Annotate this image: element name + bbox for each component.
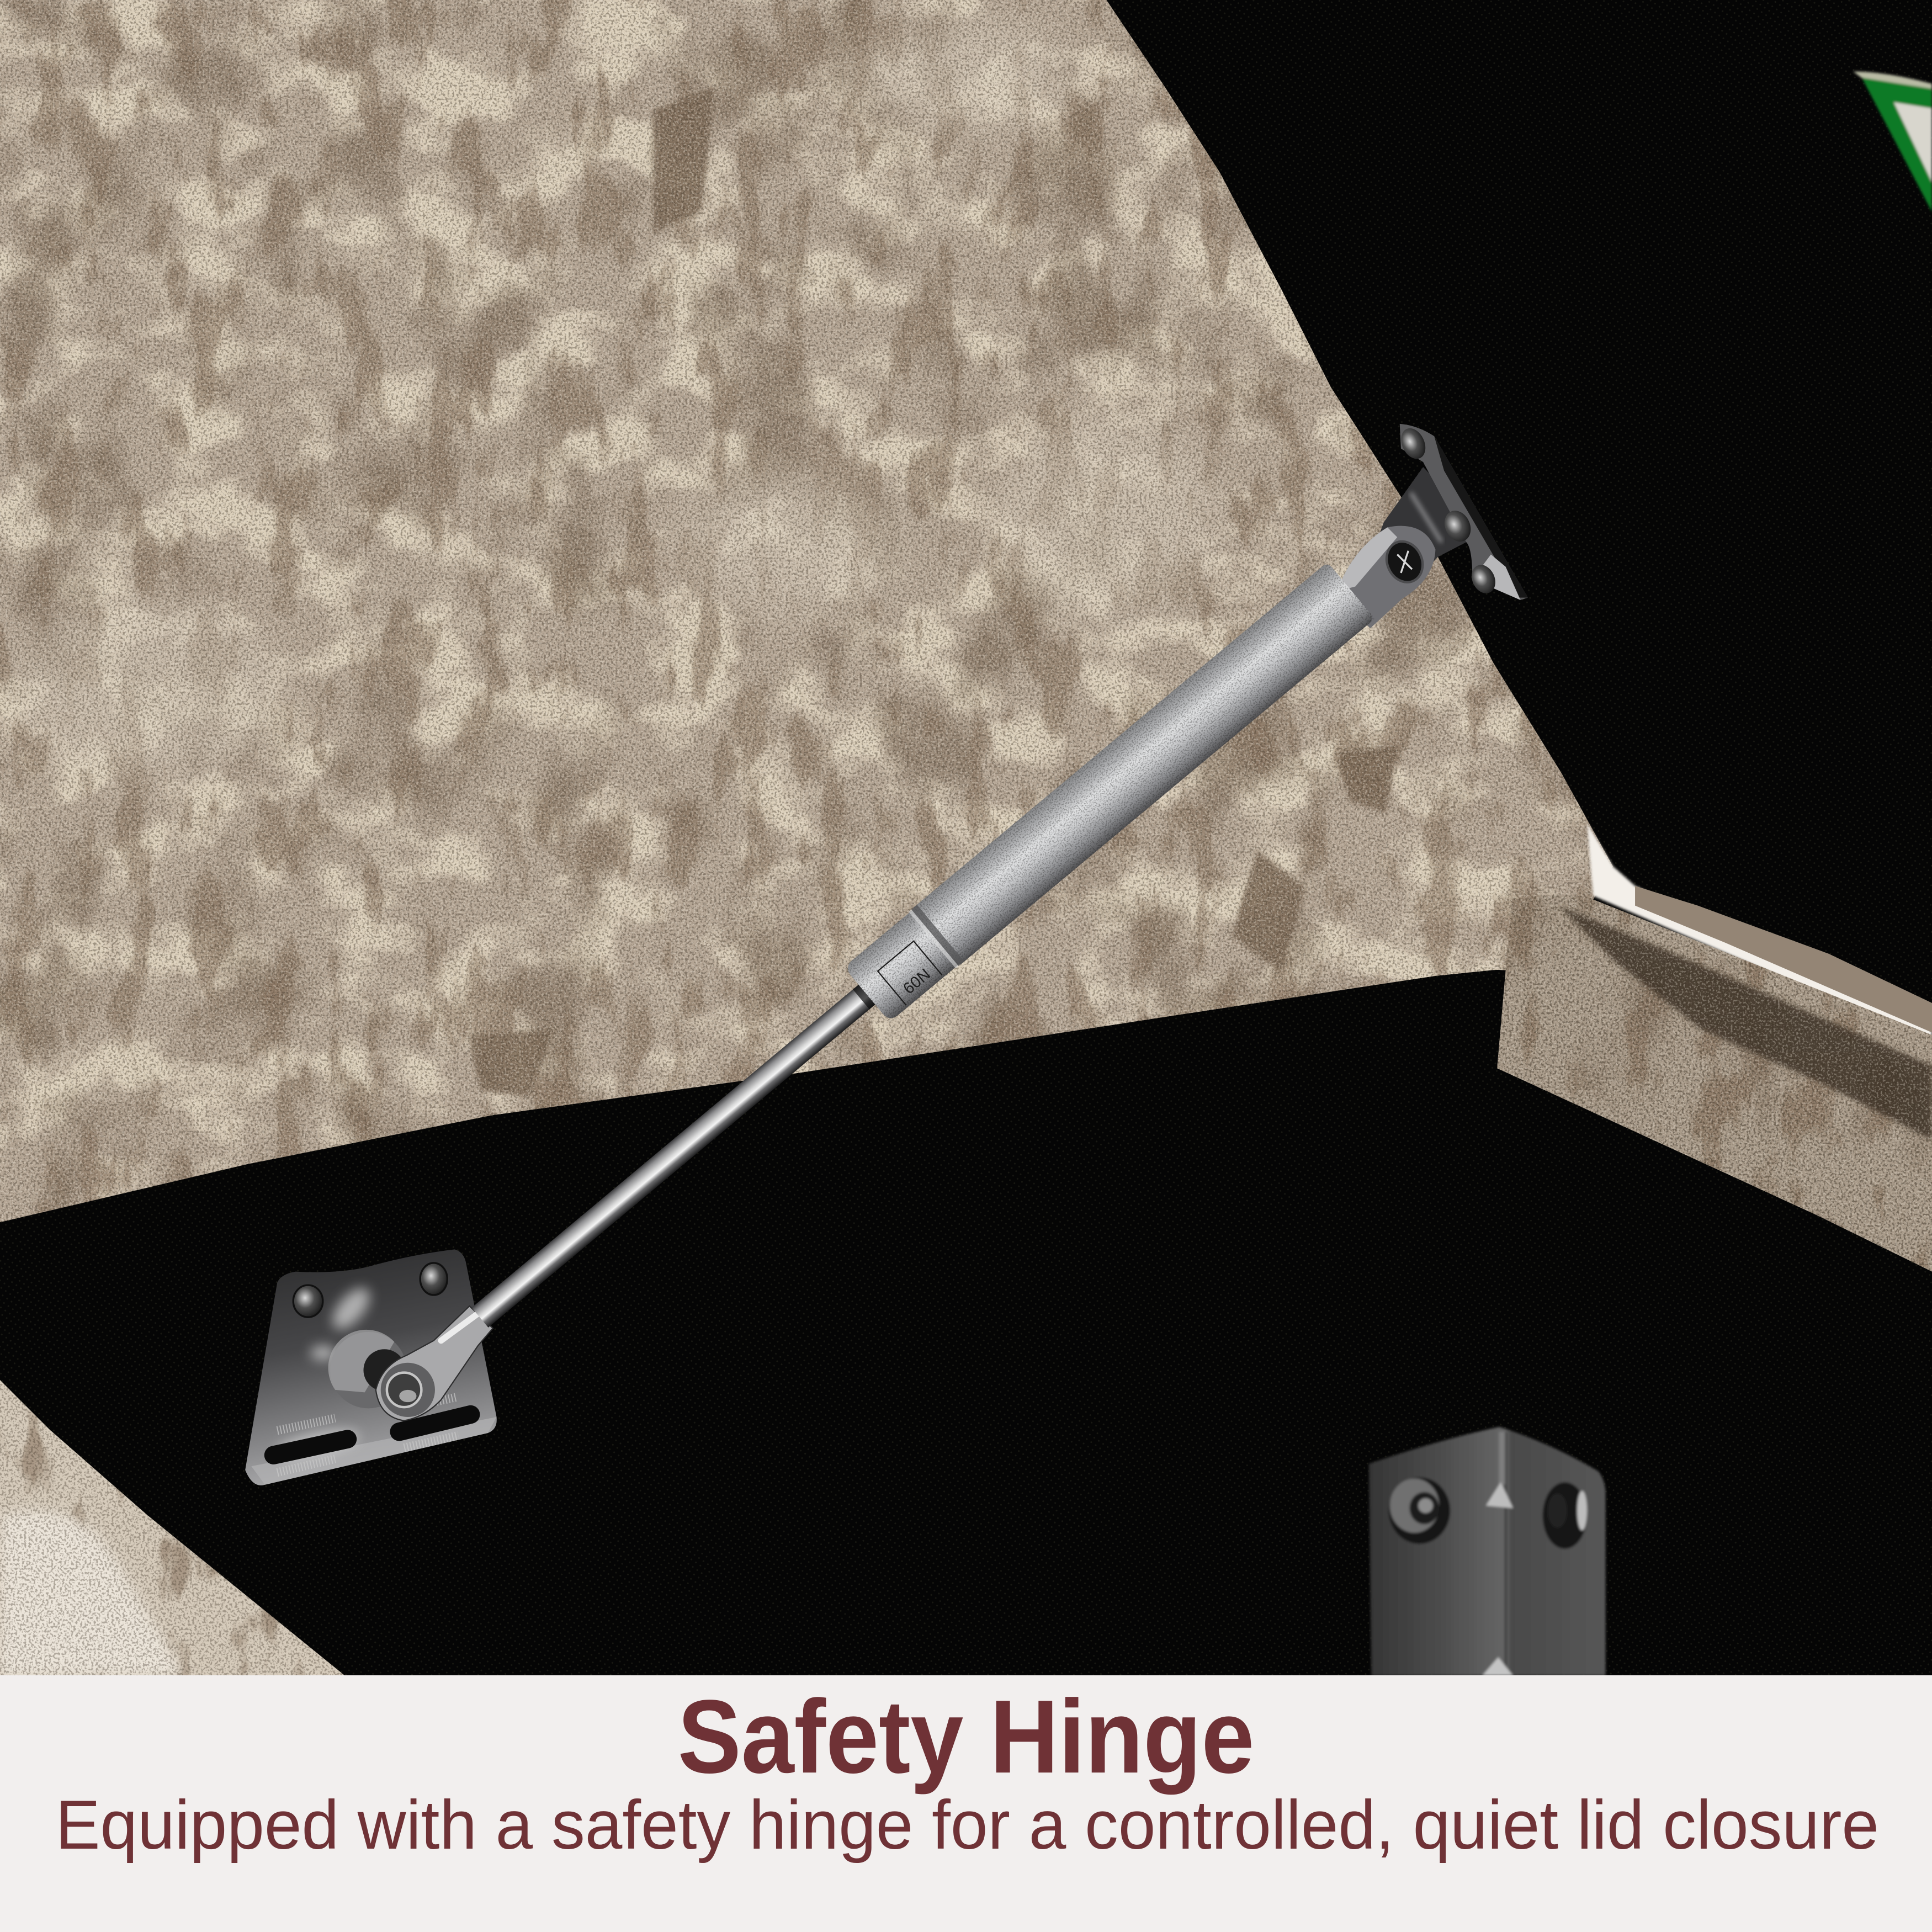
collar label <box>878 941 942 1005</box>
ball stud boss <box>330 1332 407 1408</box>
caption panel <box>0 1675 1932 1932</box>
gas strut <box>457 562 1375 1346</box>
bracket dimple top <box>1486 1482 1513 1508</box>
description: Equipped with a safety hinge for a controlled, quiet lid closure <box>55 1787 1879 1864</box>
velvet corner lower left <box>0 1368 357 1688</box>
bracket screws <box>1397 424 1500 597</box>
upper hinge bracket <box>1337 424 1528 628</box>
plate tick marks <box>277 1397 458 1472</box>
bracket screw right <box>1543 1482 1587 1549</box>
velvet lid edge <box>1479 862 1932 1281</box>
collar label: 60N <box>900 965 934 998</box>
plate highlights <box>274 1282 376 1464</box>
gas cylinder body <box>913 562 1375 964</box>
lower hinge mounting plate <box>245 1249 497 1485</box>
velvet lid panel <box>0 0 1725 1232</box>
plate slots <box>274 1414 471 1455</box>
white lid seam <box>1587 823 1932 1042</box>
green and white label corner <box>1853 71 1932 212</box>
rod end fitting <box>376 1306 493 1421</box>
bracket screw left <box>1389 1477 1450 1544</box>
strut eye and pivot screw <box>1337 526 1435 628</box>
cylinder collar <box>843 905 964 1023</box>
heading: Safety Hinge <box>678 1679 1254 1795</box>
corner angle bracket <box>1369 1427 1605 1676</box>
piston rod <box>471 980 881 1328</box>
bracket dimple bottom <box>1482 1657 1513 1676</box>
upper lid fringe <box>1635 886 1932 1033</box>
plate screws <box>293 1263 447 1317</box>
